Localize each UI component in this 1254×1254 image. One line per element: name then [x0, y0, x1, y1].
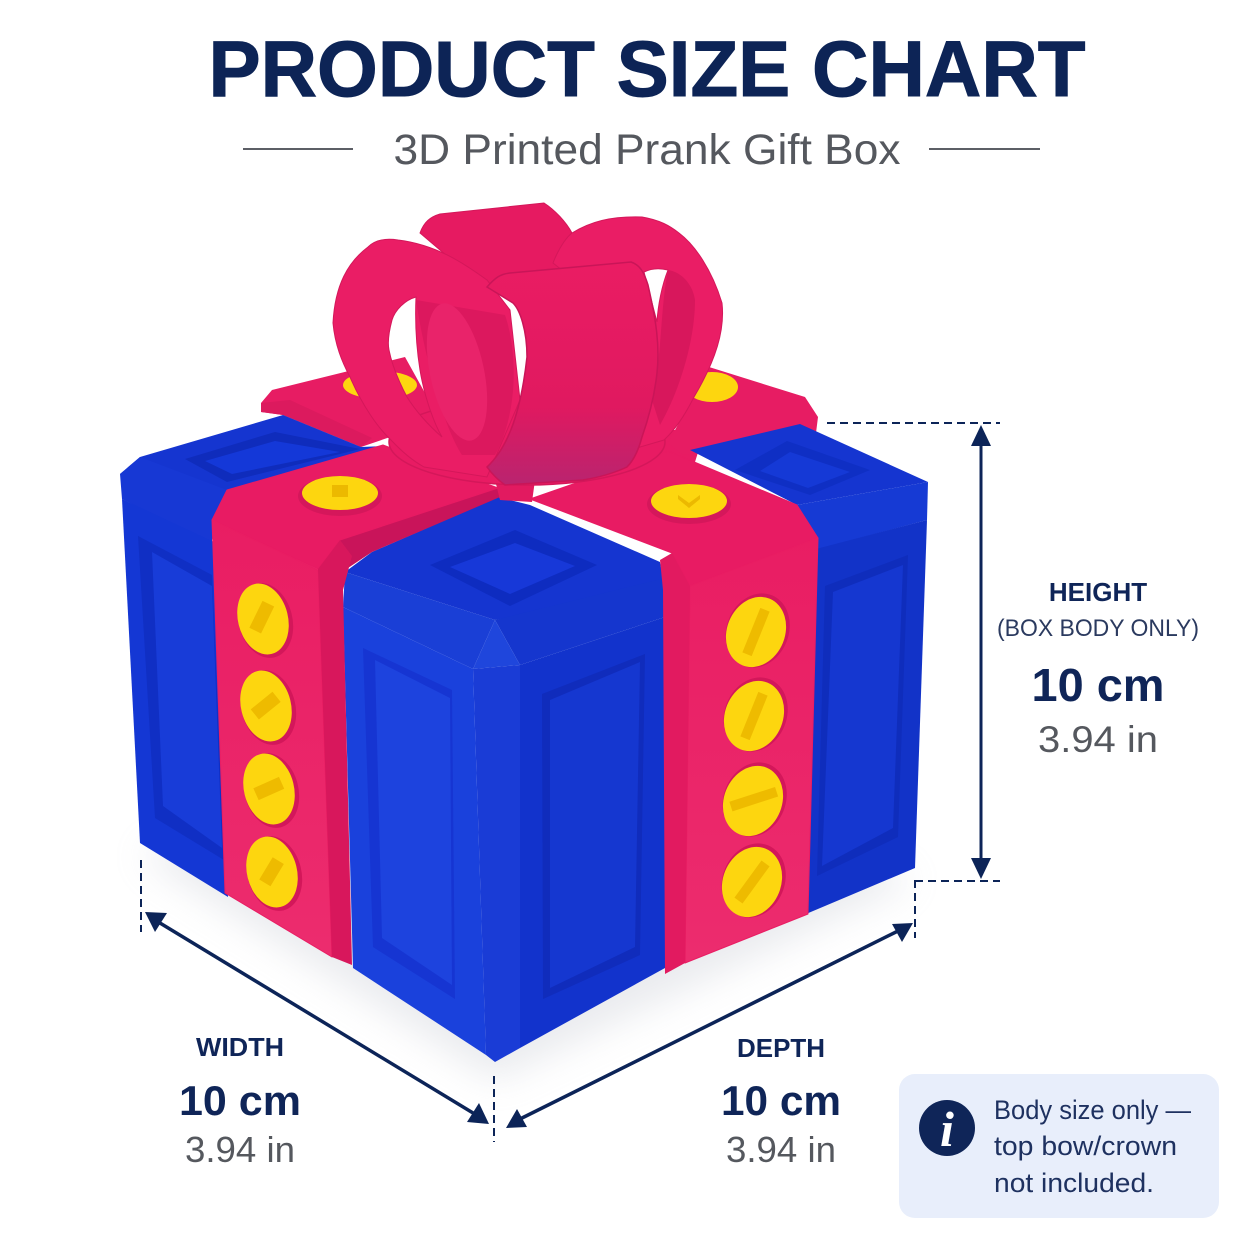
gift box illustration	[120, 203, 928, 1080]
height label: 3.94 in	[1038, 719, 1158, 760]
yellow screws: left strip	[230, 577, 310, 917]
front blue block	[343, 497, 665, 1062]
depth dimension arrow	[506, 880, 915, 1128]
left pink ribbon	[212, 445, 500, 965]
back pink ribbon	[261, 357, 818, 462]
height label	[997, 577, 1199, 760]
bow right loop	[553, 217, 723, 450]
left blue block	[120, 415, 385, 897]
width label	[179, 1032, 301, 1170]
width dimension arrow	[141, 860, 494, 1142]
icon: info	[919, 1100, 975, 1157]
right pink ribbon	[530, 451, 818, 974]
callout: body size note: top bow/crown	[994, 1131, 1177, 1161]
depth label: 10 cm	[721, 1077, 841, 1124]
depth label: DEPTH	[737, 1033, 825, 1063]
subtitle: 3D Printed Prank Gift Box	[394, 126, 901, 174]
width label: 10 cm	[179, 1077, 301, 1124]
height label: HEIGHT	[1049, 577, 1147, 607]
depth label	[721, 1033, 841, 1170]
height label: 10 cm	[1032, 659, 1164, 711]
bow back loop	[420, 203, 600, 290]
depth label: 3.94 in	[726, 1129, 836, 1170]
bow left loop	[333, 239, 520, 477]
right blue block	[690, 424, 928, 914]
callout: body size note	[899, 1074, 1219, 1218]
height dimension arrow	[827, 423, 1000, 881]
bow base disc	[389, 399, 665, 502]
callout: body size note: not included.	[994, 1168, 1154, 1198]
callout: body size note: Body size only —	[994, 1095, 1191, 1125]
width label: WIDTH	[196, 1032, 284, 1062]
height label: (BOX BODY ONLY)	[997, 615, 1199, 642]
icon: info: i	[940, 1101, 954, 1157]
title: PRODUCT SIZE CHART	[208, 24, 1086, 113]
yellow screws: right strip	[711, 584, 801, 927]
pink bow	[333, 203, 723, 502]
bow front loop	[487, 262, 658, 485]
width label: 3.94 in	[185, 1129, 295, 1170]
